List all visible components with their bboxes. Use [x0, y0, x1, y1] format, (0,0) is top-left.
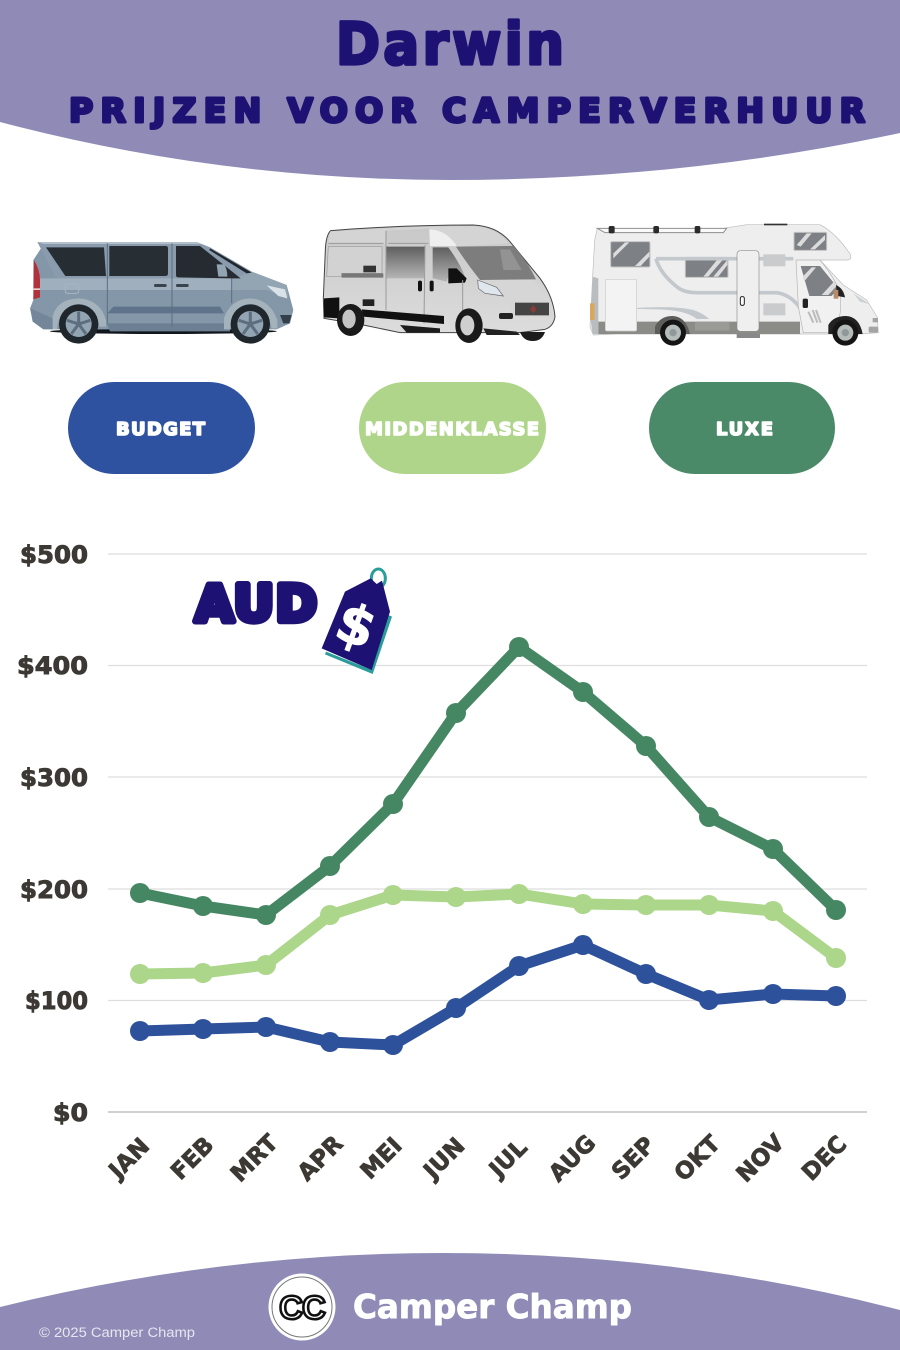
line chart	[17, 541, 867, 1188]
pill: budget: BUDGET	[116, 419, 206, 440]
series: middenklasse	[130, 884, 846, 984]
icon: mid-range panel van	[323, 225, 555, 343]
icon: luxury motorhome	[590, 224, 878, 346]
series: budget	[130, 935, 846, 1055]
subtitle: PRIJZEN VOOR CAMPERVERHUUR	[69, 91, 865, 130]
header banner	[0, 0, 900, 180]
icon: budget minivan	[30, 242, 293, 344]
copyright: © 2025 Camper Champ	[39, 1325, 195, 1340]
y-axis labels: $0	[53, 1099, 88, 1127]
footer banner	[0, 1253, 900, 1350]
x-axis month labels: OKT	[670, 1131, 726, 1187]
x-axis month labels: AUG	[544, 1130, 601, 1187]
x-axis month labels: NOV	[732, 1130, 790, 1188]
x-axis month labels: JUL	[483, 1134, 533, 1184]
y-axis labels: $100	[25, 987, 88, 1015]
x-axis month labels: APR	[293, 1131, 349, 1186]
pill: middenklasse: MIDDENKLASSE	[365, 419, 539, 440]
title: Darwin	[336, 11, 564, 79]
logo	[268, 1274, 336, 1340]
x-axis month labels: SEP	[607, 1132, 660, 1185]
icon: price tag	[322, 569, 392, 674]
brand name: Camper Champ	[353, 1287, 632, 1326]
x-axis month labels: JUN	[418, 1133, 470, 1186]
currency label: AUD	[195, 575, 317, 633]
pill: budget	[68, 382, 255, 474]
x-axis month labels: JAN	[103, 1133, 155, 1185]
logo: CC	[279, 1289, 325, 1326]
pill: middenklasse	[359, 382, 546, 474]
x-axis month labels: FEB	[166, 1132, 219, 1185]
y-axis labels: $300	[20, 764, 88, 792]
y-axis labels: $500	[20, 541, 88, 569]
series: luxe	[130, 637, 846, 925]
pill: luxe: LUXE	[716, 419, 773, 440]
y-axis labels: $200	[20, 876, 88, 904]
x-axis month labels: DEC	[797, 1131, 852, 1186]
pill: luxe	[649, 382, 835, 474]
icon: price tag: $	[328, 589, 384, 662]
x-axis month labels: MEI	[356, 1133, 408, 1185]
x-axis month labels	[103, 1130, 852, 1188]
y-axis labels	[17, 541, 88, 1127]
y-axis labels: $400	[17, 652, 88, 680]
x-axis month labels: MRT	[226, 1130, 284, 1187]
